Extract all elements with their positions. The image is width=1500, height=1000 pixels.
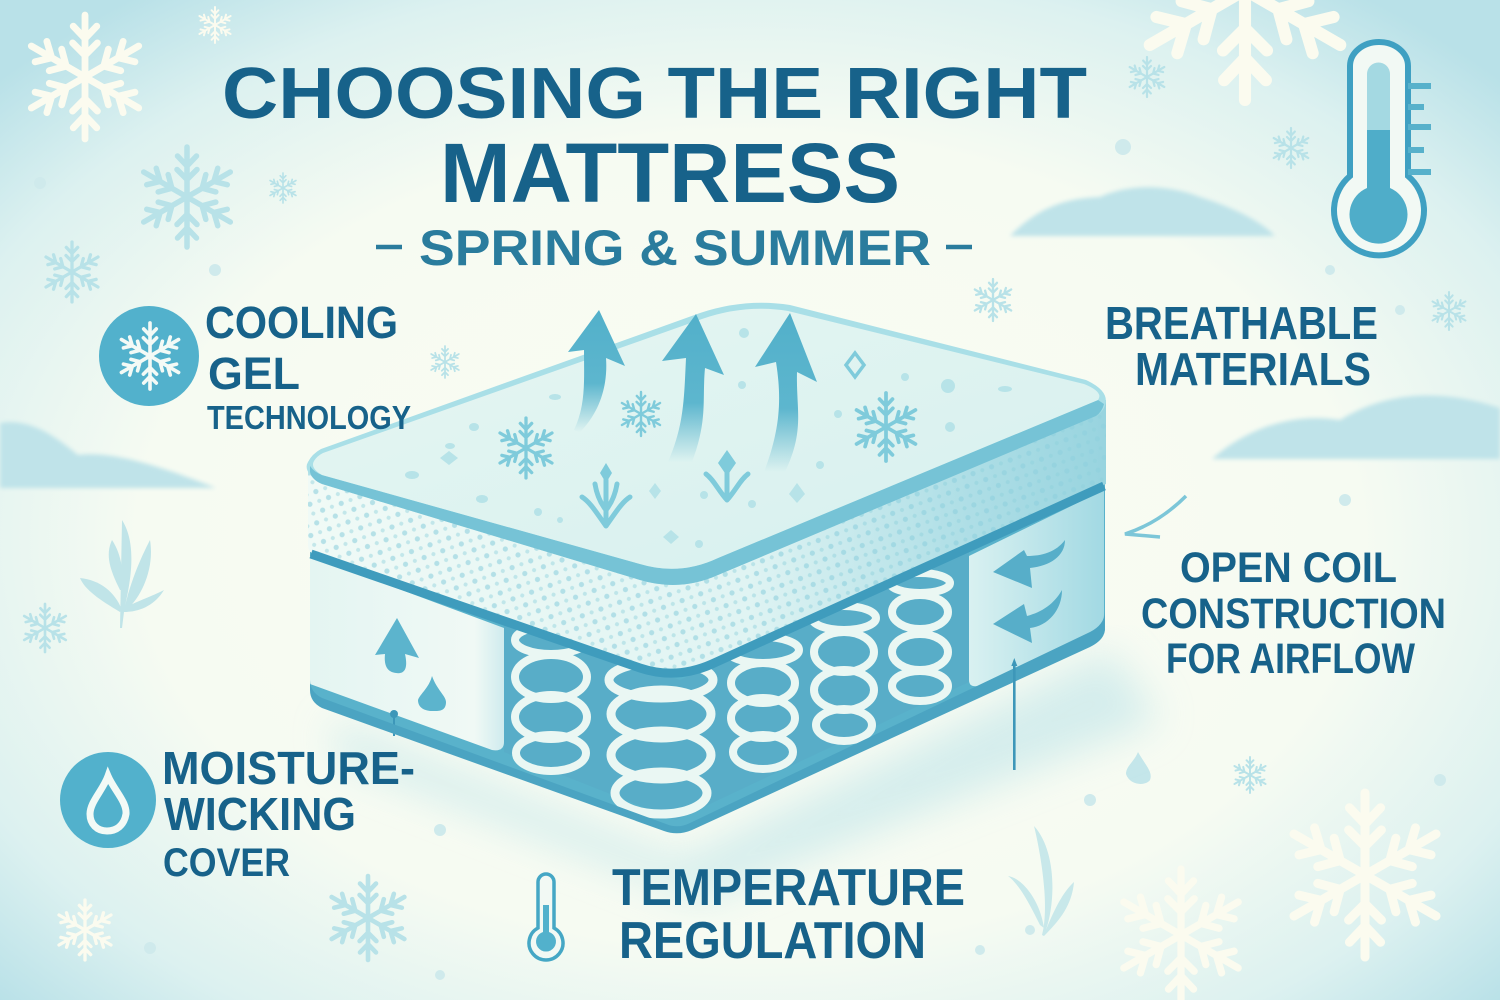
icon: droplet badge [60,752,156,848]
leaf sprig left [80,520,164,628]
mattress ground shadow [330,650,1160,900]
open coil label: CONSTRUCTION [1141,590,1446,638]
moisture arrow and drop [375,618,446,711]
background dots [34,139,1446,980]
cooling gel label [99,297,411,436]
moisture wicking label [60,742,415,885]
top surface front stripe [310,400,1104,585]
temperature regulation label: REGULATION [619,912,926,970]
cooling gel label: TECHNOLOGY [207,399,411,436]
cooling gel label: GEL [208,348,300,399]
top surface rim [307,303,1106,585]
surface diamond [846,353,864,377]
title: SPRING & SUMMER [419,220,931,276]
airflow arrows [993,540,1065,643]
rising airflow arrows [568,310,817,472]
moisture wicking label: COVER [163,841,290,885]
temperature regulation label [529,859,965,970]
top surface [313,309,1099,569]
coil cavity [504,550,969,820]
title: MATTRESS [440,126,900,220]
open coil label: FOR AIRFLOW [1166,635,1415,683]
breathable materials label: MATERIALS [1135,343,1371,395]
mattress [307,303,1106,833]
lower layer base [310,484,1105,831]
band seam [311,486,1104,673]
temperature regulation label: TEMPERATURE [612,859,965,917]
title [222,54,1087,276]
leaf sprig right [1008,826,1074,936]
icon: snowflake badge [99,306,199,406]
surface speckles [405,328,1012,548]
cover pin [390,710,398,736]
surface sprigs [582,465,748,526]
cooling gel label: COOLING [205,297,398,348]
surface snowflakes [497,392,919,478]
breathable materials label [1105,297,1378,395]
base edge [310,612,1105,833]
springs [515,573,950,814]
left panel [310,556,504,750]
moisture wicking label: MOISTURE- [162,742,415,794]
leader tick [1125,496,1186,537]
right panel [969,490,1104,686]
surface sprig tips [600,450,736,483]
small drop [1126,752,1151,784]
breathable materials label: BREATHABLE [1105,297,1378,349]
leader line [1011,658,1017,770]
title: CHOOSING THE RIGHT [222,54,1087,134]
open coil label [1141,544,1446,683]
icon: small thermometer [529,874,563,960]
moisture wicking label: WICKING [164,788,356,840]
open coil label: OPEN COIL [1180,544,1397,592]
decorative hills [0,187,1500,488]
quilted band [308,400,1106,671]
thermometer icon: top right [1334,42,1431,255]
